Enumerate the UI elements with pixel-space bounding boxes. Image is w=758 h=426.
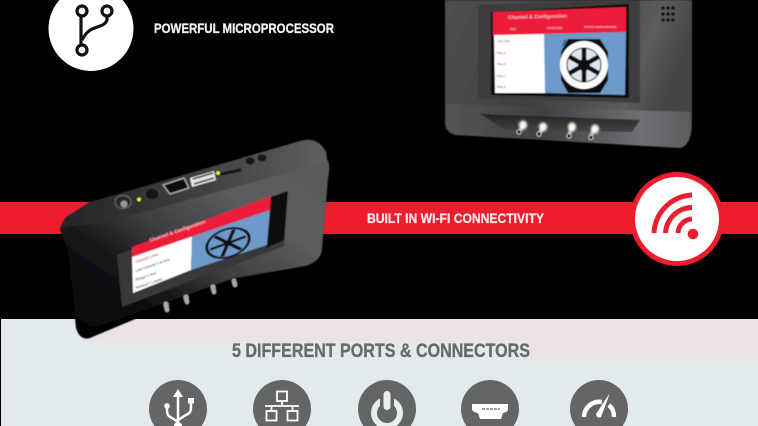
fan wheel xyxy=(560,39,608,93)
screen bezel xyxy=(117,191,288,307)
list entries xyxy=(497,39,510,89)
list entries: Channel 1 Info xyxy=(135,252,159,264)
microprocessor icon xyxy=(48,0,134,71)
icon: network xyxy=(253,380,311,426)
right bezel black xyxy=(266,191,288,248)
screen white pane xyxy=(132,236,192,293)
speaker grille xyxy=(661,6,675,22)
screen list pane xyxy=(494,34,545,93)
section heading: 5 DIFFERENT PORTS & CONNECTORS xyxy=(232,340,530,362)
connector recess xyxy=(480,114,640,132)
screen frame xyxy=(491,4,629,98)
list entries: Last Test xyxy=(497,39,510,43)
status led xyxy=(216,170,220,176)
screen blue pane xyxy=(191,210,270,270)
connectors xyxy=(517,120,599,140)
screen tabs: CONFIGURE xyxy=(547,26,563,30)
screen bezel xyxy=(478,0,640,103)
list entries: Nearest 1 Loader xyxy=(135,277,164,290)
power jack xyxy=(115,196,131,208)
wifi label: BUILT IN WI-FI CONNECTIVITY xyxy=(367,211,544,226)
screen blue pane xyxy=(544,32,626,95)
red band xyxy=(0,202,758,234)
fan wheel xyxy=(203,223,253,263)
bottom connectors xyxy=(166,281,235,310)
two round holes xyxy=(246,154,266,164)
device body xyxy=(60,140,329,339)
list entries: Range 1 Test xyxy=(135,271,157,282)
list entries: Play 8 xyxy=(497,85,506,89)
list entries: Play 5 xyxy=(497,51,506,55)
ethernet port xyxy=(163,178,189,194)
card slot xyxy=(222,170,240,174)
list entries: Last channel 1 at test xyxy=(135,257,171,273)
screen title: Channel & Configuration xyxy=(149,219,206,244)
device body xyxy=(445,0,692,148)
icon: usb xyxy=(149,380,207,426)
screen tabs: INFO xyxy=(510,27,516,31)
top port side xyxy=(60,140,327,229)
wifi icon xyxy=(630,172,724,266)
usb port xyxy=(190,171,216,187)
screen tabs xyxy=(510,25,617,31)
screen tabs: STATUS CONFIGURATION xyxy=(584,25,617,29)
icon: power xyxy=(358,380,416,426)
audio jack xyxy=(145,188,159,200)
screen header xyxy=(493,7,626,35)
list entries xyxy=(135,252,171,290)
device: wall-mounted front view xyxy=(445,0,692,148)
bottom panel background xyxy=(1,319,758,426)
screen header xyxy=(132,196,271,257)
icon: gauge xyxy=(570,380,628,426)
yellow led xyxy=(136,197,142,202)
list entries: Play 6 xyxy=(497,62,506,66)
microprocessor label: POWERFUL MICROPROCESSOR xyxy=(154,20,334,36)
icon: hdmi xyxy=(461,380,519,426)
front face xyxy=(60,160,329,327)
channel letter: A xyxy=(562,39,568,48)
screen title: Channel & Configuration xyxy=(508,13,567,21)
lower body highlight xyxy=(446,104,691,148)
list entries: Play 7 xyxy=(497,74,506,78)
device: angled port view xyxy=(60,140,329,339)
